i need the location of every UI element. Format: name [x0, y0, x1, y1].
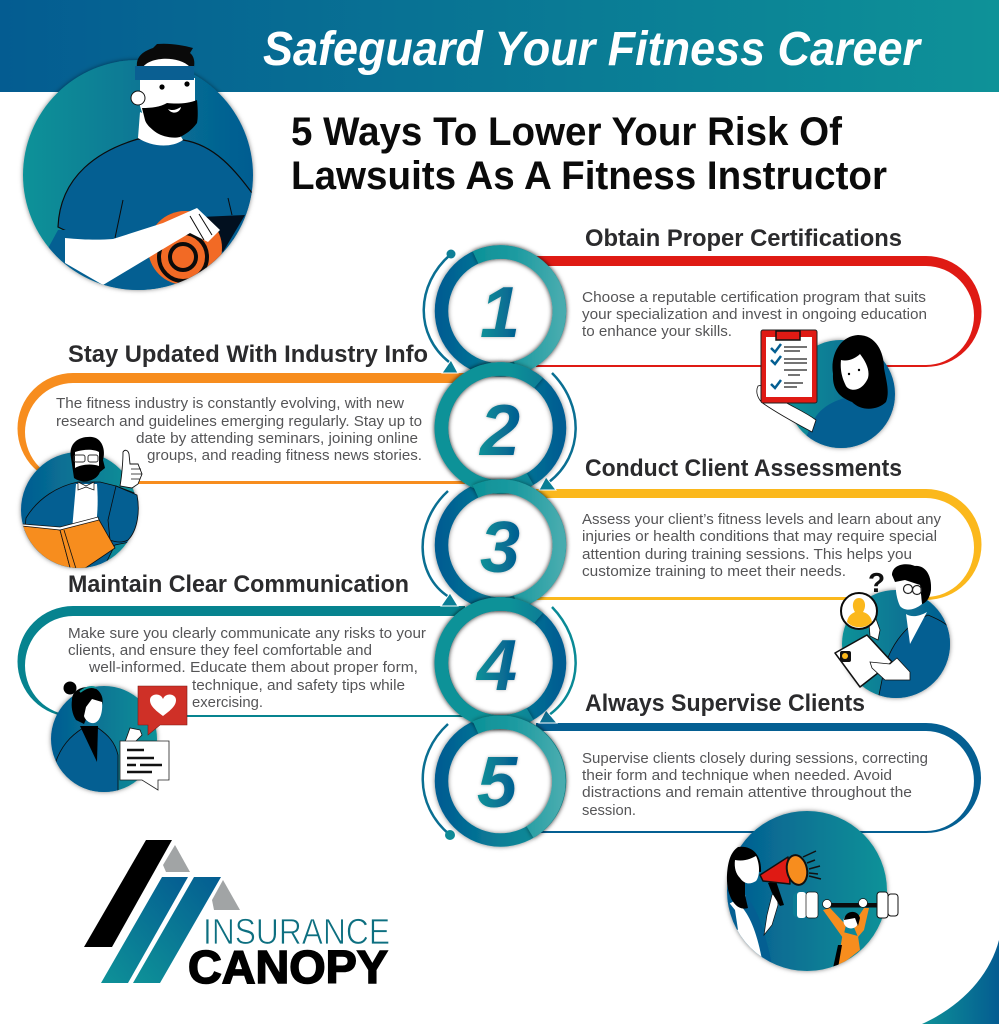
question mark: ?: [868, 567, 885, 598]
step 1 text: [582, 225, 927, 340]
ribbon: orange step 2: [18, 373, 465, 484]
main heading: 5 Ways To Lower Your Risk Of: [291, 110, 843, 154]
ring base 2: [442, 369, 560, 487]
number 5: 5: [477, 743, 518, 823]
logo: Insurance Canopy: CANOPY: [188, 941, 388, 993]
step 4 text: technique, and safety tips while: [192, 677, 405, 694]
step 3 text: Conduct Client Assessments: [585, 455, 902, 482]
ring 4 overlay: [441, 604, 538, 722]
step 1 text: your specialization and invest in ongoing education: [582, 306, 927, 323]
ring base 5: [442, 722, 560, 840]
step 5 text: Always Supervise Clients: [585, 690, 865, 717]
ribbon: teal step 4: [18, 606, 465, 717]
step 4 text: exercising.: [192, 694, 263, 711]
number 4: 4: [475, 626, 517, 706]
arrow arcs: [423, 250, 576, 840]
arc 1 with dot and arrow: [424, 250, 458, 373]
ribbon: red step 1: [536, 256, 982, 367]
step 5 text: session.: [582, 802, 636, 819]
step 1 text: to enhance your skills.: [582, 323, 732, 340]
header banner: [0, 0, 999, 92]
step 3 text: Assess your client’s fitness levels and learn about any: [582, 511, 942, 528]
number 1: 1: [480, 273, 520, 353]
illustration: man assessing client: [835, 564, 955, 700]
arc 4 with arrow: [539, 607, 576, 723]
logo: Insurance Canopy: [84, 840, 390, 993]
arc 5 with dot: [423, 724, 455, 840]
step 5 text: distractions and remain attentive throughout the: [582, 784, 912, 801]
step 2 text: date by attending seminars, joining online: [136, 430, 418, 447]
illustration: megaphone and barbell: [727, 811, 898, 975]
illustration: man with headband: [20, 44, 260, 300]
step 1 text: Choose a reputable certification program that suits: [582, 289, 926, 306]
numbered chain of rings: [441, 252, 560, 840]
number 3: 3: [480, 508, 520, 588]
step 3 text: customize training to meet their needs.: [582, 563, 846, 580]
step 5 text: their form and technique when needed. Avoid: [582, 767, 892, 784]
ring 2 overlay: [441, 369, 538, 487]
ring 1 overlay: [476, 252, 559, 368]
step 4 text: Maintain Clear Communication: [68, 571, 409, 598]
step 5 text: Supervise clients closely during sessions, correcting: [582, 750, 928, 767]
step 4 text: [68, 571, 426, 711]
ribbon: yellow step 3: [536, 489, 982, 600]
lifter: [822, 898, 869, 938]
man head: [131, 44, 198, 146]
logo: Insurance Canopy: INSURANCE: [203, 911, 390, 952]
megaphone: [760, 851, 821, 887]
step 2 text: research and guidelines emerging regularly. Stay up to: [56, 413, 422, 430]
ring base 1: [442, 252, 560, 370]
step 5 text: [582, 690, 928, 819]
step 2 text: The fitness industry is constantly evolving, with new: [56, 395, 404, 412]
step 3 text: injuries or health conditions that may require special: [582, 528, 937, 545]
step 3 text: attention during training sessions. This helps you: [582, 546, 912, 563]
step 4 text: clients, and ensure they feel comfortable and: [68, 642, 372, 659]
arc 3 with arrow: [423, 491, 458, 606]
step 4 text: well-informed. Educate them about proper form,: [88, 659, 418, 676]
illustration: woman with clipboard: [757, 330, 900, 450]
ring base 3: [442, 486, 560, 604]
main heading: Lawsuits As A Fitness Instructor: [291, 154, 887, 198]
corner decoration: [922, 940, 999, 1024]
illustration: woman with speech bubbles: [51, 682, 187, 795]
step 3 text: [582, 455, 942, 580]
banner title: Safeguard Your Fitness Career: [263, 23, 922, 76]
ribbon: blue step 5: [536, 723, 981, 833]
step 1 text: Obtain Proper Certifications: [585, 225, 902, 252]
ring 5 overlay: [476, 722, 559, 832]
arc 2 with arrow: [539, 373, 576, 490]
ring 3 overlay: [476, 486, 559, 602]
ring base 4: [442, 604, 560, 722]
speech bubble: lines: [120, 741, 169, 790]
barbell: [793, 892, 898, 918]
number 2: 2: [478, 391, 520, 471]
speech bubble: heart: [138, 686, 187, 735]
step 2 text: Stay Updated With Industry Info: [68, 341, 428, 368]
step 4 text: Make sure you clearly communicate any risks to your: [68, 625, 426, 642]
illustration: man with book: [20, 437, 142, 575]
step 2 text: [56, 341, 428, 464]
step 2 text: groups, and reading fitness news stories.: [147, 447, 422, 464]
main heading: [291, 110, 887, 198]
